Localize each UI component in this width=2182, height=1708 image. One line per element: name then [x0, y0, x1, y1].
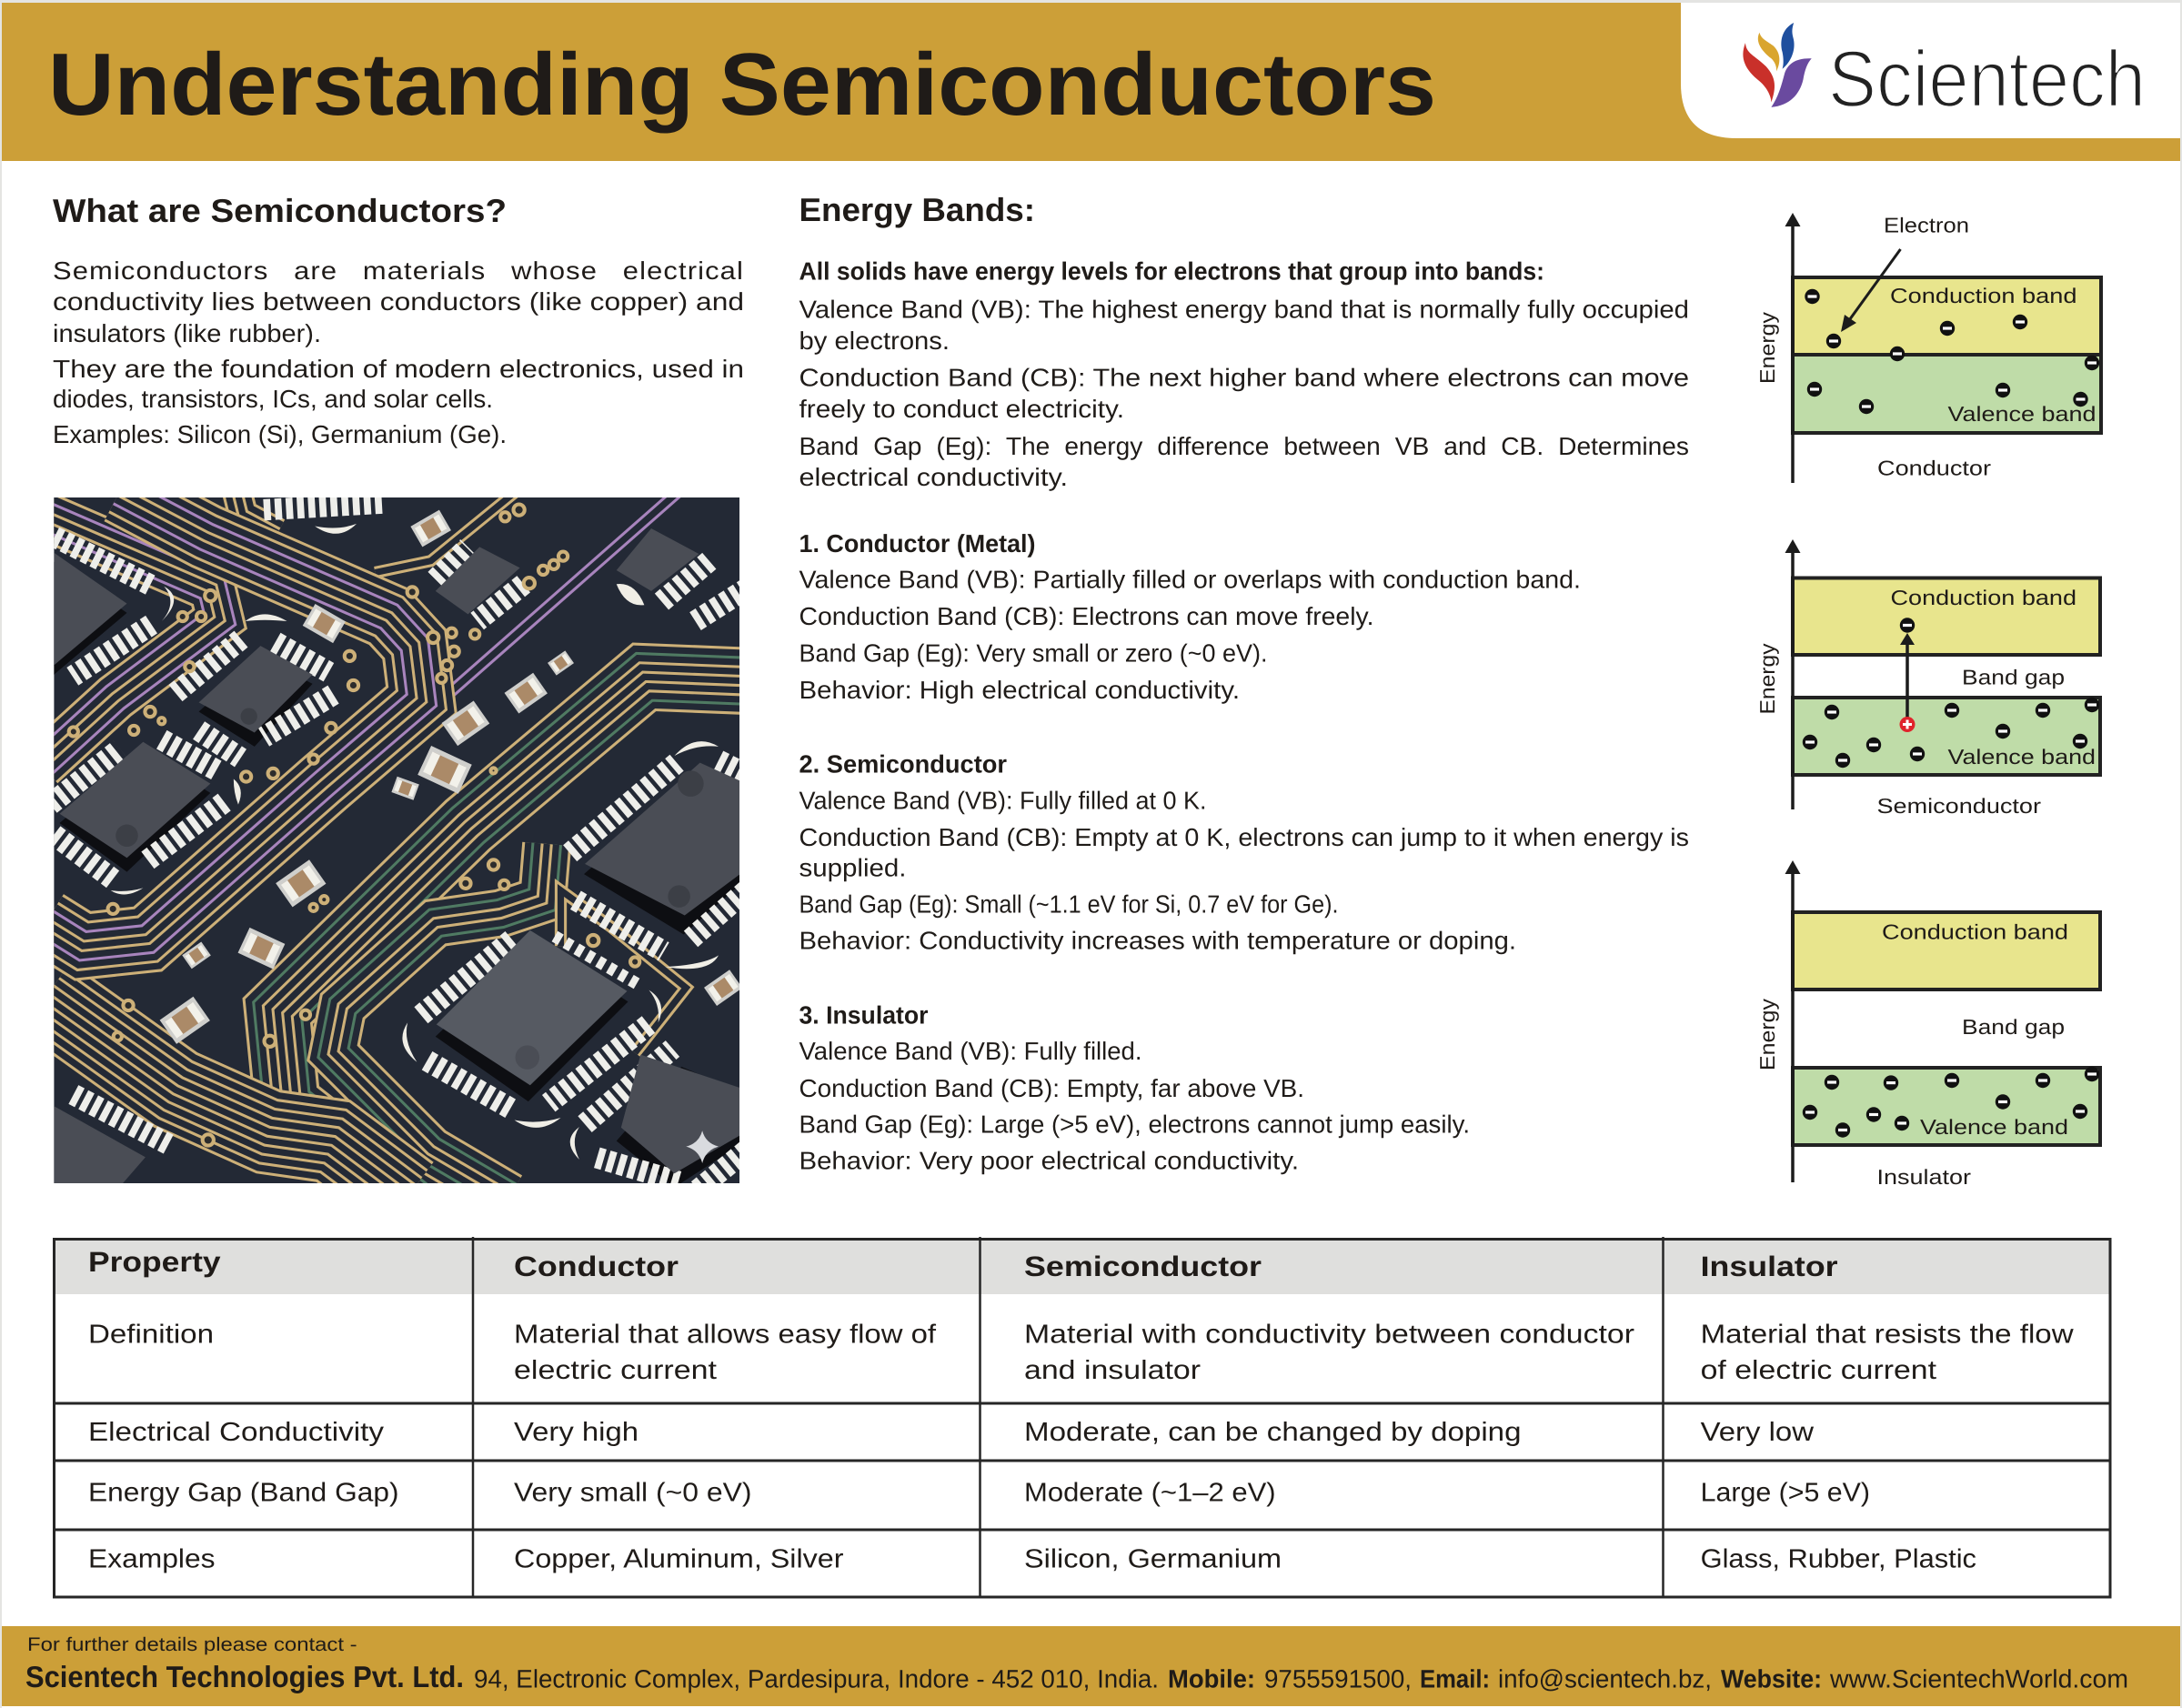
text block: insulator: Valence Band (VB): Fully filled.	[799, 1037, 1142, 1065]
text block: definition	[53, 256, 744, 448]
electrons	[1803, 1067, 2099, 1138]
table row: electrical conductivity: Very low	[1701, 1418, 1815, 1447]
text block: conductor: Behavior: High electrical conductivity.	[799, 676, 1240, 704]
valence band	[1793, 1068, 2100, 1145]
text block: definition: They are the foundation of modern electronics, used in	[53, 355, 744, 383]
text block: conductor: 1. Conductor (Metal)	[799, 529, 1035, 558]
table row: examples: Glass, Rubber, Plastic	[1701, 1545, 1976, 1574]
table header row: Property	[88, 1246, 221, 1278]
heading: energy bands: Energy Bands:	[799, 191, 1035, 228]
text block: definition: diodes, transistors, ICs, and solar cells.	[53, 385, 493, 413]
table row: energy gap: Energy Gap (Band Gap)	[88, 1479, 398, 1508]
solder pads and pins	[50, 503, 747, 1192]
text block: semiconductor: 2. Semiconductor	[799, 749, 1007, 779]
table header row	[88, 1246, 1838, 1282]
conduction band	[1793, 578, 2100, 655]
labels: Energy	[1755, 998, 1779, 1070]
table row: examples: Copper, Aluminum, Silver	[514, 1545, 844, 1574]
logo panel	[1681, 3, 2180, 138]
traces	[36, 487, 760, 1206]
labels: Valence band	[1948, 745, 2096, 769]
table row: energy gap: Moderate (~1–2 eV)	[1024, 1479, 1276, 1508]
text block: definition: conductivity lies between conductors (like copper) and	[53, 287, 744, 316]
labels: Band gap	[1962, 1015, 2065, 1039]
valence band	[1793, 355, 2101, 433]
text block: definition: insulators (like rubber).	[53, 319, 321, 347]
contact details: Scientech Technologies Pvt. Ltd.	[25, 1660, 464, 1693]
panel: what are semiconductors	[53, 192, 744, 448]
labels: Band gap	[1962, 665, 2065, 688]
contact details: Email:	[1420, 1664, 1490, 1693]
text block: semiconductor: Band Gap (Eg): Small (~1.1 eV for Si, 0.7 eV for Ge).	[799, 889, 1339, 919]
icon: hole	[1899, 717, 1916, 732]
energy axis arrow	[1785, 213, 1801, 483]
valence band	[1793, 698, 2100, 775]
text block: semiconductor: Conduction Band (CB): Empty at 0 K, electrons can jump to it when energy is	[799, 823, 1689, 851]
text block: definition: Semiconductors are materials whose electrical	[53, 256, 744, 285]
solder highlights	[111, 524, 719, 1160]
labels	[1755, 586, 2096, 818]
text block: band overview: electrical conductivity.	[799, 463, 1068, 491]
conduction band	[1793, 912, 2100, 990]
text block: semiconductor: supplied.	[799, 853, 906, 882]
icon: Scientech flames logo	[1743, 23, 1812, 107]
vias	[69, 504, 639, 1146]
energy axis arrow	[1785, 539, 1801, 809]
text block: insulator: Band Gap (Eg): Large (>5 eV), electrons cannot jump easily.	[799, 1110, 1470, 1139]
components	[160, 510, 742, 1044]
text block: insulator	[799, 1000, 1470, 1175]
contact details: 94, Electronic Complex, Pardesipura, Indore - 452 010, India.	[474, 1664, 1159, 1693]
labels: Electron	[1884, 214, 1969, 237]
arrow: electron pointer	[1841, 249, 1901, 332]
table row: energy gap	[88, 1479, 1870, 1508]
contact details	[25, 1660, 2128, 1693]
text block: semiconductor	[799, 749, 1689, 955]
panel: energy bands text	[799, 191, 1689, 1175]
heading: what are semiconductors: What are Semiconductors?	[53, 192, 507, 229]
header banner	[2, 3, 2180, 161]
text block: insulator: Conduction Band (CB): Empty, far above VB.	[799, 1074, 1304, 1102]
table row: examples: Examples	[88, 1545, 215, 1574]
labels: Conduction band	[1890, 586, 2076, 609]
diagram: insulator band	[1755, 860, 2100, 1189]
table row: definition: Material that resists the flow	[1701, 1321, 2075, 1350]
contact details: 9755591500,	[1264, 1664, 1412, 1693]
text block: conductor	[799, 529, 1581, 704]
table row: examples	[88, 1545, 1976, 1574]
table row: energy gap: Very small (~0 eV)	[514, 1479, 751, 1508]
electrons	[1803, 618, 2099, 768]
table row: definition: and insulator	[1024, 1356, 1201, 1385]
electrons	[1805, 289, 2099, 414]
chip shadows	[45, 557, 747, 1188]
text block: conductor: Valence Band (VB): Partially filled or overlaps with conduction band.	[799, 566, 1581, 594]
contact prompt: For further details please contact -	[27, 1634, 357, 1655]
chips	[45, 528, 747, 1192]
table row: electrical conductivity	[88, 1418, 1815, 1447]
text block: band overview: Valence Band (VB): The highest energy band that is normally fully occupied	[799, 296, 1689, 324]
table header row: Conductor	[514, 1251, 679, 1282]
labels: Energy	[1755, 311, 1779, 384]
text block: semiconductor: Valence Band (VB): Fully filled at 0 K.	[799, 786, 1206, 815]
labels	[1755, 214, 2096, 479]
labels: Energy	[1755, 643, 1779, 715]
text block: conductor: Conduction Band (CB): Electrons can move freely.	[799, 602, 1373, 630]
table row: definition	[88, 1321, 2075, 1385]
text block: conductor: Band Gap (Eg): Very small or zero (~0 eV).	[799, 639, 1268, 668]
table row: definition: Material with conductivity between conductor	[1024, 1321, 1634, 1350]
contact details: Mobile:	[1168, 1664, 1255, 1693]
diagram: conductor band	[1755, 213, 2101, 483]
text block: insulator: 3. Insulator	[799, 1000, 929, 1030]
contact details: www.ScientechWorld.com	[1829, 1664, 2128, 1693]
labels: Valence band	[1948, 402, 2096, 426]
table row: definition: Definition	[88, 1321, 214, 1350]
table row: energy gap: Large (>5 eV)	[1701, 1479, 1870, 1508]
icon: sparkle watermark	[686, 1130, 719, 1163]
text block: band overview: Band Gap (Eg): The energy difference between VB and CB. Determines	[799, 432, 1689, 460]
text block: band overview: by electrons.	[799, 327, 950, 355]
small pads	[555, 936, 639, 985]
contact details: Website:	[1721, 1664, 1822, 1693]
text block: band overview: freely to conduct electricity.	[799, 395, 1124, 423]
table row: electrical conductivity: Very high	[514, 1418, 639, 1447]
logo wordmark: Scientech	[1828, 34, 2146, 124]
table row: definition: of electric current	[1701, 1356, 1936, 1385]
conduction band	[1793, 277, 2101, 355]
title: Understanding Semiconductors	[48, 35, 1436, 134]
contact details: info@scientech.bz,	[1498, 1664, 1712, 1693]
table header row: Semiconductor	[1024, 1251, 1262, 1282]
text block: insulator: Behavior: Very poor electrical conductivity.	[799, 1146, 1299, 1175]
comparison table	[54, 1237, 2110, 1597]
text block: semiconductor: Behavior: Conductivity increases with temperature or doping.	[799, 926, 1516, 955]
photo: circuit board	[36, 487, 760, 1206]
energy axis arrow	[1785, 860, 1801, 1182]
labels: Insulator	[1877, 1165, 1971, 1189]
text block: band overview: All solids have energy levels for electrons that group into bands:	[799, 256, 1544, 286]
table row: electrical conductivity: Moderate, can be changed by doping	[1024, 1418, 1521, 1447]
diagram: semiconductor band	[1755, 539, 2100, 818]
labels: Conductor	[1877, 457, 1991, 480]
table header row: Insulator	[1701, 1251, 1838, 1282]
footer banner	[2, 1626, 2180, 1706]
labels: Valence band	[1920, 1115, 2068, 1139]
arrow: excitation	[1900, 633, 1915, 718]
table header background	[54, 1239, 2110, 1294]
text block: band overview	[799, 256, 1689, 491]
text block: band overview: Conduction Band (CB): The next higher band where electrons can move	[799, 364, 1689, 392]
table row: electrical conductivity: Electrical Conductivity	[88, 1418, 385, 1447]
labels	[1755, 920, 2068, 1189]
labels: Semiconductor	[1877, 794, 2041, 818]
labels: Conduction band	[1890, 284, 2077, 307]
table row: definition: Material that allows easy flow of	[514, 1321, 937, 1350]
text block: definition: Examples: Silicon (Si), Germanium (Ge).	[53, 420, 507, 448]
table row: definition: electric current	[514, 1356, 717, 1385]
table row: examples: Silicon, Germanium	[1024, 1545, 1282, 1574]
labels: Conduction band	[1882, 920, 2068, 944]
